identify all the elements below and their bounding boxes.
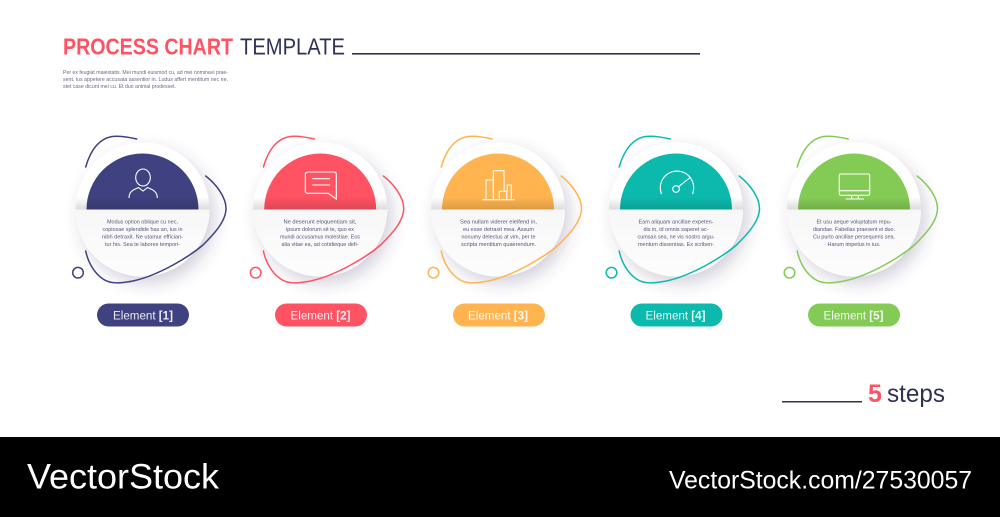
pill 1 — [97, 304, 189, 326]
pill 1: Element [1] — [113, 310, 173, 322]
icon: speech bubble — [305, 172, 336, 199]
body text 1: tur his. Sea te labores tempori- — [105, 242, 180, 248]
body text 2: ipsum dolorum sit te, quo ex — [286, 227, 354, 233]
curves 5 — [797, 136, 938, 283]
ring 5 — [784, 267, 795, 278]
body text 5: diandae. Fabellas praesent ei duo. — [813, 227, 895, 233]
body text 2: Ne deserunt eloquentiam sit, — [284, 220, 357, 226]
title: PROCESS CHART — [63, 34, 233, 60]
curves 3 — [441, 136, 582, 283]
body text 1: Modus option oblique cu nec, — [107, 220, 178, 226]
pill 5: Element [5] — [824, 310, 884, 322]
ring 4 — [606, 267, 617, 278]
body text 4: dis in, id omnis saperet ac- — [644, 227, 709, 233]
panel: element 3 — [428, 136, 582, 326]
circle card 1 — [75, 142, 210, 276]
ring 3 — [428, 267, 439, 278]
body text 5: Cu purto ancillae persequeris sea. — [813, 234, 895, 240]
pill 4 — [630, 304, 722, 326]
ring 2 — [250, 267, 261, 278]
title: TEMPLATE — [240, 34, 345, 60]
body text 1: nibh detraxit. Ne utamur effician- — [102, 234, 183, 240]
footer bar — [0, 437, 1000, 517]
intro text block: sent, ius appetere accusata assentior in. Ludus affert mentitum nec ne, — [63, 77, 228, 83]
body text 4 — [638, 220, 715, 248]
body text 4: mentum dissentias. Ex scriben- — [638, 242, 714, 248]
body text 2 — [280, 220, 360, 248]
body text 3: Sea nullam viderer eleifend in, — [460, 220, 537, 226]
panel: element 4 — [606, 136, 760, 326]
curves 4 — [619, 136, 760, 283]
body text 1: copiosae splendide has an, ius in — [102, 227, 182, 233]
footer bar: VectorStock.com/27530057 — [669, 466, 972, 494]
pill 3: Element [3] — [468, 310, 528, 322]
circle card 4 — [608, 142, 744, 276]
icon: gauge — [660, 171, 694, 194]
pill 2: Element [2] — [290, 310, 351, 322]
body text 4: cumsan sea, ne vis nostro argu- — [638, 234, 715, 240]
body text 3 — [460, 220, 537, 248]
intro text block — [63, 70, 228, 90]
panel: element 1 — [73, 136, 226, 326]
footer bar: VectorStock — [27, 458, 220, 496]
body text 3: eu esse detraxit mea. Assum — [463, 227, 534, 233]
circle card 3 — [430, 142, 566, 276]
body text 2: alia vitae ea, ad cotidieque defi- — [282, 242, 359, 248]
pill 5 — [808, 304, 900, 326]
icon: buildings — [482, 171, 515, 200]
pill 4: Element [4] — [646, 310, 706, 322]
body text 3: scripta mentitum quaerendum. — [461, 242, 536, 248]
icon: person — [129, 169, 157, 198]
body text 1 — [102, 220, 183, 248]
panel: element 5 — [784, 136, 938, 326]
body text 3: nonumy delectus at vim, per te — [462, 234, 536, 240]
body text 4: Eam aliquam ancillae expeten- — [638, 220, 714, 226]
circle card 5 — [786, 142, 922, 276]
steps counter: 5 — [868, 380, 882, 408]
ring 1 — [73, 267, 83, 278]
steps counter: steps — [887, 380, 945, 408]
body text 5: Harum impetus in ius. — [828, 242, 881, 248]
pill 3 — [453, 304, 545, 326]
steps counter — [782, 380, 945, 408]
pill 2 — [275, 304, 367, 326]
body text 2: mundi accusamus molestiae. Eos — [280, 234, 360, 240]
body text 5 — [813, 220, 895, 248]
intro text block: Per ex feugiat maiestatis. Mei mundi euismod cu, ad mei nominavi prae- — [63, 70, 228, 76]
body text 5: Et usu aeque voluptatum repu- — [816, 220, 892, 226]
intro text block: stet case dicunt mei cu. Et duo animal prodesset. — [63, 84, 176, 90]
panel: element 2 — [250, 136, 404, 326]
circle card 2 — [253, 142, 388, 276]
icon: monitor — [839, 174, 870, 199]
curves 2 — [263, 136, 404, 283]
title — [63, 34, 700, 60]
curves 1 — [86, 136, 226, 283]
